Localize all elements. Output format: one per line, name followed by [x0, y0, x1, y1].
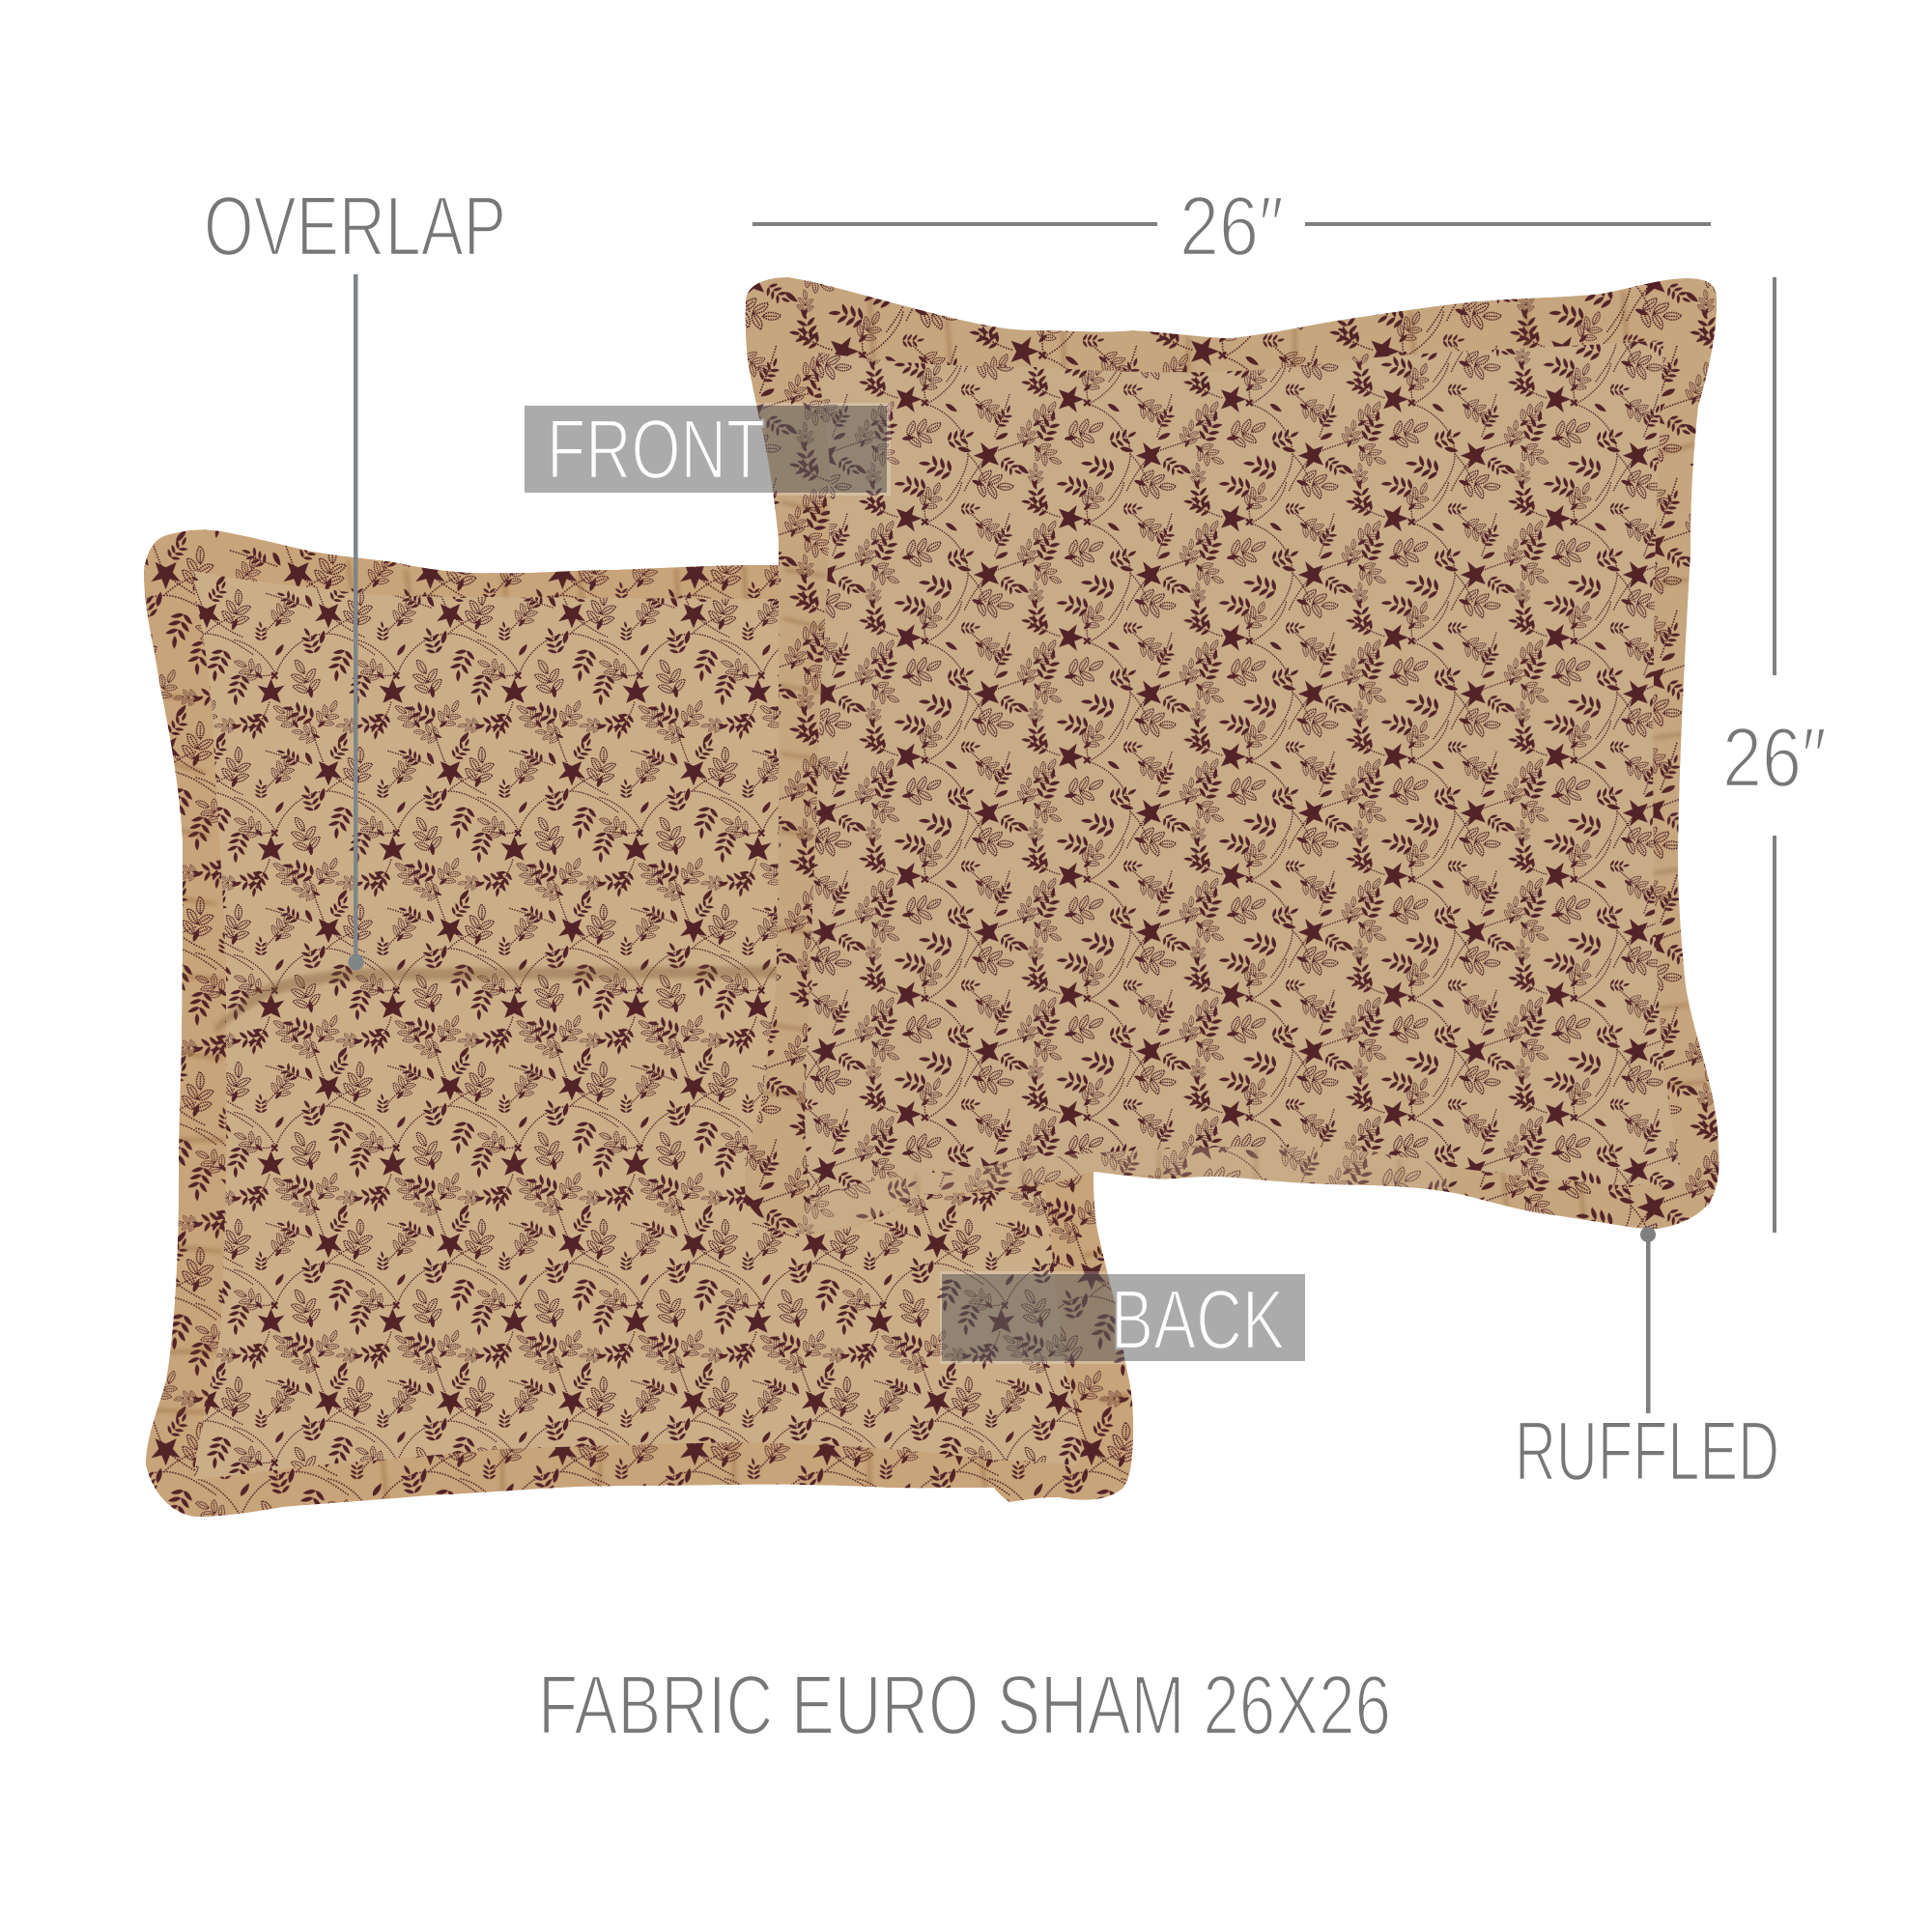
label: RUFFLED: RUFFLED: [1515, 1405, 1779, 1498]
callout: overlap: [204, 180, 506, 970]
height line top: [1773, 277, 1776, 675]
label: FRONT: FRONT: [547, 403, 765, 497]
label: BACK: BACK: [1111, 1273, 1285, 1367]
width line left: [753, 222, 1157, 226]
label: OVERLAP: OVERLAP: [204, 180, 506, 273]
dimension: height 26 inches: [1722, 277, 1827, 1233]
dimension: width 26 inches: [753, 180, 1711, 273]
front body fabric: [805, 340, 1681, 1198]
front ruffle: [745, 277, 1719, 1234]
front pale lower band: [795, 1147, 1449, 1234]
height value: 26″: [1722, 711, 1827, 805]
width value: 26″: [1179, 180, 1284, 273]
height line bottom: [1773, 836, 1776, 1233]
back overlap fold: [214, 966, 779, 1034]
panel: front view of the sham: [745, 277, 1719, 1234]
width line right: [1305, 222, 1711, 226]
ruffled leader dot and line: [1640, 1227, 1656, 1413]
back body fabric: [191, 570, 1082, 1480]
overlap leader line: [348, 274, 363, 970]
back ruffle pleats: [155, 560, 1128, 1499]
front ruffle pleats: [757, 290, 1706, 1219]
panel: back view of the sham: [144, 529, 1133, 1517]
back ruffle: [144, 529, 1133, 1517]
callout: ruffled: [1515, 1227, 1779, 1498]
caption: FABRIC EURO SHAM 26X26: [538, 1659, 1391, 1752]
back label box: [940, 1271, 1307, 1367]
front label box: [524, 403, 891, 497]
